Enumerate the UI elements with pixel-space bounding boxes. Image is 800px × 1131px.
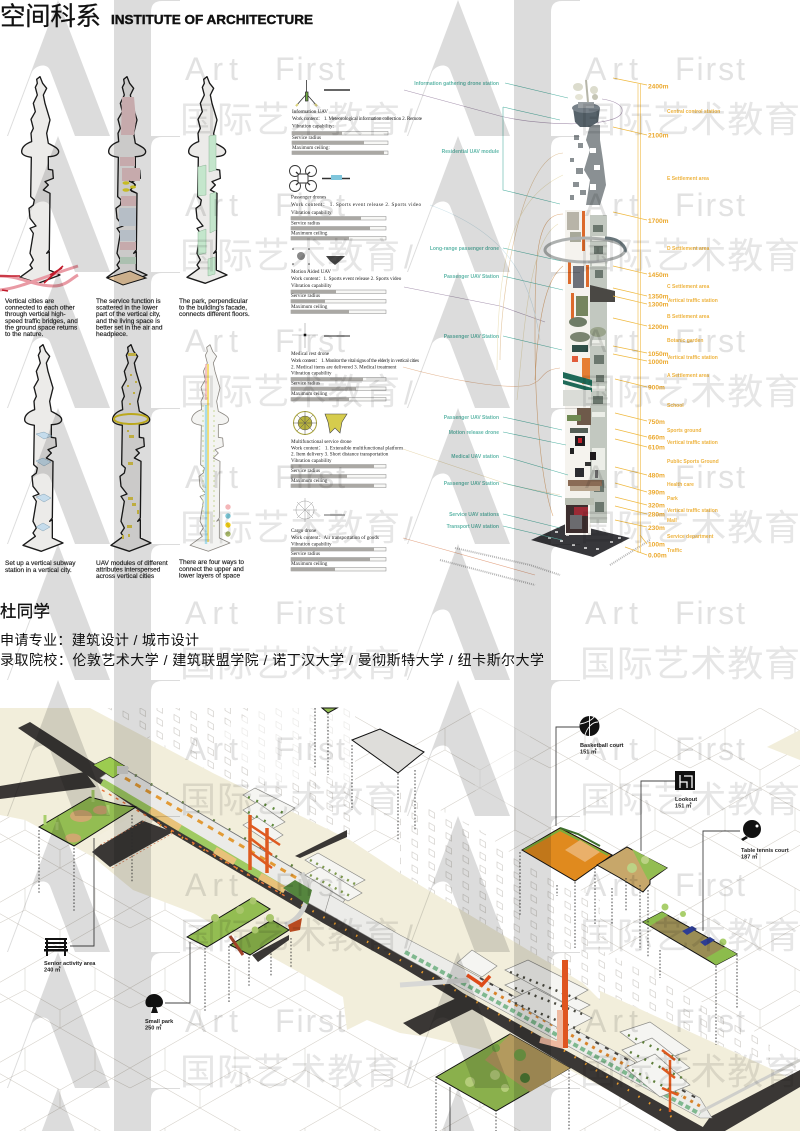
height values: 280m	[648, 512, 665, 518]
icon: quadcopter drone	[290, 166, 350, 192]
watermark overlay: /	[404, 239, 413, 275]
basketball callout: 151 ㎡	[580, 748, 597, 756]
panel: motion aided UAV: Maximum ceiling	[291, 304, 328, 310]
zone labels: Vertical traffic station	[667, 508, 718, 514]
height values: 610m	[648, 444, 665, 452]
watermark overlay: First	[275, 459, 345, 495]
zone labels: Service department	[667, 534, 714, 540]
title	[0, 3, 313, 31]
elevated walkway	[100, 765, 800, 1118]
zone labels: Public Sports Ground	[667, 459, 719, 465]
facade buildings north	[100, 708, 355, 840]
height values: 390m	[648, 490, 665, 496]
tower base	[531, 523, 630, 557]
height values: 1300m	[648, 302, 669, 308]
diagram: traffic bridges tower	[0, 77, 78, 338]
watermark overlay: /	[404, 647, 413, 683]
caption: connect the upper and	[179, 566, 244, 573]
dotted support lines	[39, 708, 737, 1131]
panel: medical rest drone: Medical rest drone	[291, 351, 330, 357]
small park callout: Small park	[145, 1019, 174, 1025]
icon: medical drone	[292, 323, 350, 348]
watermark overlay: 国际艺术教育	[180, 771, 400, 823]
watermark overlay: Art	[585, 731, 638, 767]
caption: through vertical high-	[5, 311, 66, 318]
teal station labels: Long-range passenger drone	[430, 246, 499, 252]
watermark overlay: First	[675, 595, 745, 631]
height values: 0.00m	[648, 552, 667, 560]
caption: and the living space is	[96, 318, 161, 325]
zone labels	[667, 109, 720, 554]
watermark overlay: Art	[185, 459, 238, 495]
watermark overlay: Art	[585, 1003, 638, 1039]
colored floors	[563, 211, 615, 533]
teal station labels: Passenger UAV Station	[444, 274, 499, 280]
watermark overlay: Art	[185, 595, 238, 631]
height values: 480m	[648, 472, 665, 480]
height values: 2400m	[648, 84, 669, 90]
height values: 2100m	[648, 132, 669, 140]
zone labels: C Settlement area	[667, 284, 709, 290]
watermark overlay: Art	[185, 323, 238, 359]
watermark overlay: /	[404, 919, 413, 955]
watermark overlay: First	[675, 187, 745, 223]
teal station labels: Residential UAV module	[442, 149, 499, 155]
orange tower stacks	[243, 788, 690, 1112]
panel: cargo drone: Vibration capability	[291, 542, 332, 548]
zone labels: Vertical traffic station	[667, 355, 718, 361]
caption: speed traffic bridges, and	[5, 318, 78, 325]
panel: motion aided UAV	[291, 248, 402, 314]
teal leader lines	[503, 83, 568, 540]
roof: top terrace	[352, 729, 424, 773]
height values	[648, 84, 669, 560]
watermark overlay: Art	[185, 731, 238, 767]
watermark overlay: First	[275, 595, 345, 631]
table tennis callout: 187 ㎡	[741, 852, 758, 860]
zone labels: School	[667, 403, 684, 409]
watermark overlay: 国际艺术教育	[180, 635, 400, 687]
icon: multifunctional drone	[293, 411, 347, 435]
lookout callout: 151 ㎡	[675, 802, 692, 810]
senior activity callout: 240 ㎡	[44, 966, 61, 974]
caption: The park, perpendicular	[179, 298, 248, 305]
roof: lower park	[436, 1034, 570, 1111]
basketball callout: Basketball court	[580, 743, 624, 749]
icon: bench	[44, 938, 68, 956]
watermark overlay: First	[275, 1003, 345, 1039]
teal station labels: Information gathering drone station	[414, 81, 499, 87]
roof: table tennis court	[643, 904, 737, 965]
watermark overlay: Art	[185, 1003, 238, 1039]
icon: cargo drone	[293, 498, 345, 522]
zone labels: Central control station	[667, 109, 720, 115]
watermark overlay: 国际艺术教育	[580, 499, 800, 551]
watermark overlay: First	[675, 731, 745, 767]
watermark overlay: 国际艺术教育	[580, 91, 800, 143]
height values: 230m	[648, 525, 665, 532]
watermark overlay: First	[275, 51, 345, 87]
watermark overlay: 国际艺术教育	[580, 635, 800, 687]
panel: multifunctional service drone: Work content： 1. Extensible multifunctional platform	[291, 444, 403, 452]
panel: information UAV: Service radius	[292, 135, 321, 141]
panel: passenger drones: Vibration capability	[291, 210, 332, 216]
panel: multifunctional service drone: Service radius	[291, 468, 320, 474]
panel: motion aided UAV: Motion Aided UAV	[291, 269, 331, 275]
watermark overlay: First	[675, 1003, 745, 1039]
teal station labels: Medical UAV station	[451, 454, 499, 460]
watermark overlay: First	[675, 459, 745, 495]
panel: motion aided UAV: Service radius	[291, 293, 320, 299]
teal station labels: Passenger UAV Station	[444, 334, 499, 340]
watermark overlay: First	[275, 731, 345, 767]
panel: multifunctional service drone: Maximum ceiling	[291, 478, 328, 484]
watermark overlay: 国际艺术教育	[180, 1043, 400, 1095]
watermark overlay: 国际艺术教育	[180, 91, 400, 143]
axonometric site plan	[0, 700, 800, 1131]
teal station labels: Passenger UAV Station	[444, 481, 499, 487]
height values: 1200m	[648, 324, 669, 331]
height values: 750m	[648, 419, 665, 426]
diagram: park tower	[179, 77, 250, 318]
tower crown	[572, 80, 600, 127]
height values: 1350m	[648, 294, 669, 300]
watermark overlay: /	[404, 375, 413, 411]
watermark overlay: 国际艺术教育	[580, 227, 800, 279]
chart: vertical city section	[403, 78, 720, 585]
roof: basketball court	[522, 828, 612, 881]
road network	[0, 722, 800, 1131]
height axis	[638, 84, 640, 553]
panel: medical rest drone	[291, 323, 419, 401]
watermark overlay: Art	[185, 867, 238, 903]
watermark overlay: Art	[585, 459, 638, 495]
zone labels: Vertical traffic station	[667, 440, 718, 446]
watermark overlay: 国际艺术教育	[580, 907, 800, 959]
teal station labels: Service UAV stations	[449, 512, 499, 518]
watermark overlay: 国际艺术教育	[180, 363, 400, 415]
caption: connected to each other	[5, 305, 76, 312]
zone labels: Mall	[667, 518, 677, 524]
watermark overlay: 国际艺术教育	[580, 771, 800, 823]
student info	[0, 602, 544, 668]
student info: 录取院校：伦敦艺术大学 / 建筑联盟学院 / 诺丁汉大学 / 曼彻斯特大学 / 纽卡斯尔大学	[0, 652, 544, 668]
panel: multifunctional service drone: Multifunctional service drone	[291, 438, 352, 445]
legend dots	[225, 504, 231, 537]
watermark overlay: First	[275, 187, 345, 223]
caption: The service function is	[96, 298, 161, 305]
teal station labels: Motion release drone	[449, 430, 499, 436]
caption: to the building's facade,	[179, 305, 247, 312]
caption: the ground space returns	[5, 324, 78, 331]
icon: motion drone	[292, 248, 345, 265]
panel: multifunctional service drone	[291, 411, 403, 488]
teal station labels	[414, 81, 499, 530]
watermark overlay: First	[675, 323, 745, 359]
panel: cargo drone	[291, 498, 386, 571]
roof: tiny green	[322, 708, 337, 713]
watermark overlay: First	[675, 51, 745, 87]
caption: scattered in the lower	[96, 305, 159, 312]
icon: information drone	[296, 80, 350, 106]
panel: motion aided UAV: Work content：1. Sports event release 2. Sports video	[291, 276, 402, 282]
watermark overlay: Art	[585, 867, 638, 903]
roof: lookout	[597, 847, 667, 892]
watermark overlay: 国际艺术教育	[580, 1043, 800, 1095]
caption: UAV modules of different	[96, 560, 168, 567]
title: 空间科系	[0, 3, 101, 31]
curved leader lines	[403, 90, 622, 575]
caption: connects different floors.	[179, 311, 250, 318]
height values: 1700m	[648, 218, 669, 225]
beige ground	[0, 708, 800, 1131]
watermark overlay: Art	[185, 187, 238, 223]
caption: lower layers of space	[179, 572, 240, 580]
caption: across vertical cities	[96, 573, 155, 580]
height values: 100m	[648, 542, 665, 548]
watermark overlay: First	[275, 323, 345, 359]
icon: tree	[145, 994, 163, 1013]
small park callout	[145, 942, 190, 1032]
watermark overlay: First	[275, 867, 345, 903]
panel: motion aided UAV: Vibration capability	[291, 283, 332, 289]
panel: medical rest drone: 2. Medical items are delivered 3. Medical treatment	[291, 364, 397, 370]
student info: 申请专业：建筑设计 / 城市设计	[0, 632, 199, 648]
caption: station in a vertical city.	[5, 567, 72, 574]
tower body	[565, 210, 591, 535]
icon: lookout	[675, 771, 695, 790]
height values: 1450m	[648, 272, 669, 279]
panel: medical rest drone: Vibration capability	[291, 370, 332, 376]
zone labels: B Settlement area	[667, 314, 709, 320]
roof: small park	[187, 898, 289, 955]
caption: Vertical cities are	[5, 298, 55, 305]
upper pixel blocks	[570, 125, 606, 205]
watermark overlay: /	[404, 1055, 413, 1091]
icon: basketball	[580, 716, 600, 736]
caption: to the nature.	[5, 331, 43, 338]
panel: information UAV: Information UAV	[292, 108, 328, 115]
panel: passenger drones: Work content： 1. Sports event release 2. Sports video	[291, 202, 421, 208]
student info: 杜同学	[0, 602, 50, 621]
panel: multifunctional service drone: 2. Item delivery 3. Short distance transportation	[291, 452, 389, 458]
zone labels: Traffic	[667, 548, 682, 554]
diagram: service function tower	[96, 77, 163, 338]
watermark overlay: Art	[585, 323, 638, 359]
caption: Set up a vertical subway	[5, 560, 76, 567]
panel: cargo drone: Maximum ceiling	[291, 561, 328, 567]
watermark overlay: Art	[585, 595, 638, 631]
watermark overlay: 国际艺术教育	[180, 499, 400, 551]
zone labels: Park	[667, 496, 678, 502]
caption: better set in the air and	[96, 324, 163, 331]
lookout callout: Lookout	[675, 797, 697, 803]
lookout callout	[641, 771, 697, 851]
teal station labels: Passenger UAV Station	[444, 415, 499, 421]
panel: passenger drones: Maximum ceiling	[291, 230, 328, 236]
height values: 660m	[648, 434, 665, 442]
watermark overlay: 国际艺术教育	[580, 363, 800, 415]
zone labels: Botanic garden	[667, 338, 703, 344]
teal station labels: Transport UAV station	[447, 524, 499, 530]
beige side strip	[98, 813, 146, 845]
senior activity callout: Senior activity area	[44, 961, 96, 967]
zone labels: Health care	[667, 482, 694, 488]
panel: cargo drone: Service radius	[291, 551, 320, 557]
watermark overlay: 国际艺术教育	[180, 227, 400, 279]
watermark overlay: Art	[585, 51, 638, 87]
watermark overlay: /	[404, 783, 413, 819]
panel: medical rest drone: Work content： 1. Monitor the vital signs of the elderly in vertical cities	[291, 357, 419, 364]
surrounding buildings	[0, 708, 800, 1131]
senior activity callout	[44, 838, 96, 974]
zone labels: E Settlement area	[667, 176, 709, 182]
caption: part of the vertical city,	[96, 311, 161, 318]
watermark overlay: Art	[185, 51, 238, 87]
table tennis callout: Table tennis court	[741, 848, 789, 854]
zone labels: D Settlement area	[667, 246, 709, 252]
panel: multifunctional service drone: Vibration capability	[291, 458, 332, 464]
panel: cargo drone: Cargo drone	[291, 528, 317, 534]
panel: passenger drones: Passenger drones	[291, 194, 326, 200]
zone labels: A Settlement area	[667, 373, 709, 379]
panel: passenger drones	[290, 166, 421, 240]
roof: senior activity area	[39, 790, 136, 846]
watermark overlay: Art	[585, 187, 638, 223]
panel: medical rest drone: Service radius	[291, 380, 320, 386]
height values: 320m	[648, 502, 665, 510]
title: INSTITUTE OF ARCHITECTURE	[111, 13, 313, 27]
caption: There are four ways to	[179, 559, 244, 566]
diagram: UAV modules tower	[96, 345, 168, 580]
small park callout: 250 ㎡	[145, 1024, 162, 1032]
caption: headpiece.	[96, 331, 128, 338]
zone labels: Sports ground	[667, 428, 701, 434]
icon: table tennis paddle	[741, 820, 761, 841]
height values: 1000m	[648, 359, 669, 366]
panel: information UAV: Maximum ceiling:	[292, 145, 330, 151]
panel: cargo drone: Work content：Air transportation of goods	[291, 534, 379, 541]
watermark overlay: /	[404, 103, 413, 139]
road ticks	[160, 825, 680, 1122]
zone labels: Vertical traffic station	[667, 298, 718, 304]
watermark overlay: First	[675, 867, 745, 903]
height values: 1050m	[648, 351, 669, 358]
watermark overlay: /	[404, 511, 413, 547]
panel: information UAV: Vibration capability:	[292, 124, 334, 130]
height values: 900m	[648, 384, 665, 392]
diagram: subway station tower	[5, 345, 76, 574]
caption: attributes interspersed	[96, 566, 161, 574]
table tennis callout	[703, 820, 789, 931]
panel: passenger drones: Service radius	[291, 220, 320, 226]
diagram: vertical connection tower	[179, 345, 244, 580]
panel: medical rest drone: Maximum ceiling	[291, 391, 328, 397]
watermark overlay: 国际艺术教育	[180, 907, 400, 959]
panel: information UAV: Work content： 1. Meteorological information collection 2. Remote	[292, 115, 423, 122]
lower park leader	[449, 1087, 451, 1131]
tower sky ring	[545, 238, 625, 262]
panel: information UAV	[292, 80, 423, 154]
basketball callout	[556, 716, 624, 826]
